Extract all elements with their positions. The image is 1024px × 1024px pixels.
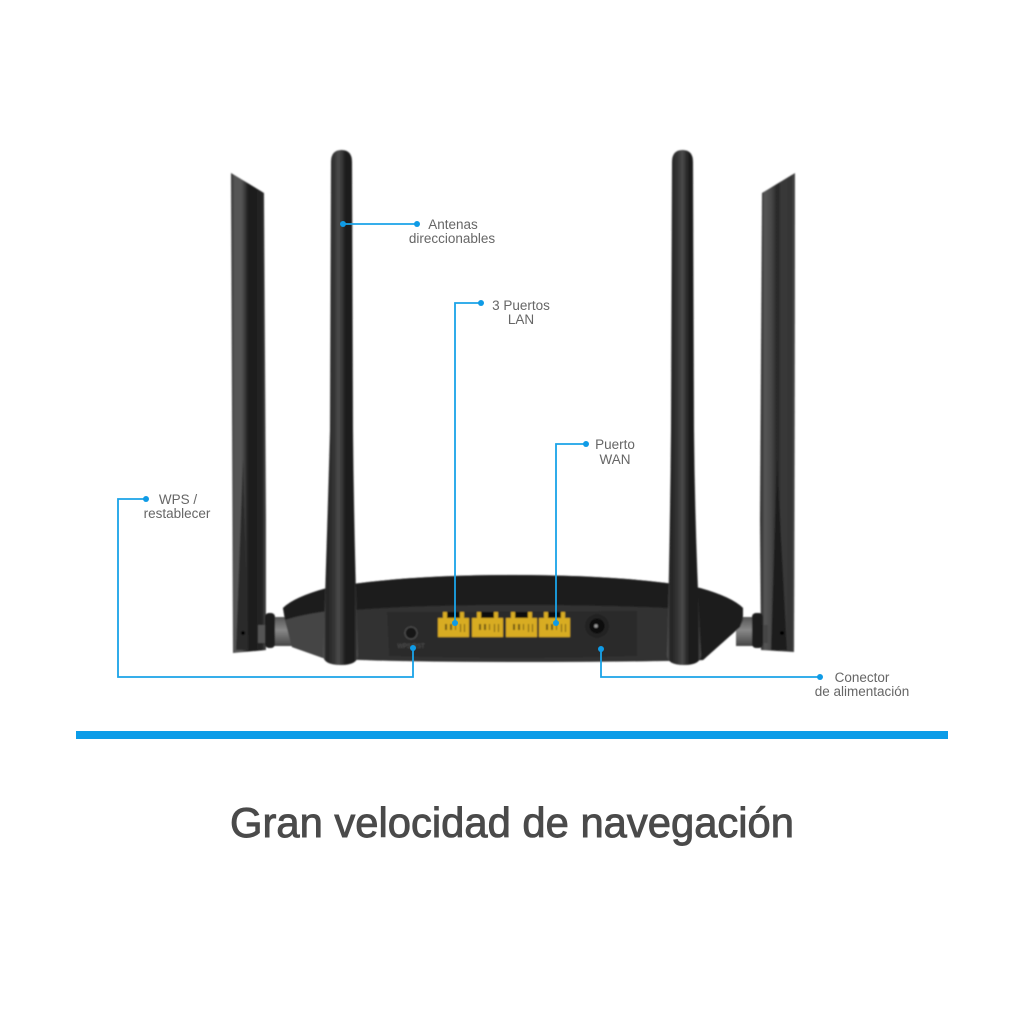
- callout: conector de alimentación: de alimentación: [815, 684, 909, 699]
- callout: puerto WAN: WAN: [600, 452, 630, 467]
- LAN port 3: [506, 612, 537, 637]
- right side wedge: [670, 608, 743, 661]
- antenna: far right flat panel: [760, 173, 795, 652]
- callout: WPS / restablecer: restablecer: [144, 506, 211, 521]
- antenna hinge right: [736, 613, 768, 648]
- top shell: [283, 575, 743, 620]
- callout: 3 puertos LAN: [452, 298, 550, 626]
- rear port recess: [387, 611, 637, 658]
- WPS reset button: [397, 627, 425, 650]
- callout: WPS / restablecer: WPS /: [159, 492, 197, 507]
- callout: antenas direccionables: Antenas: [428, 217, 478, 232]
- WAN port: [539, 612, 570, 637]
- callout: antenas direccionables: [340, 217, 495, 246]
- callout: 3 puertos LAN: 3 Puertos: [492, 298, 550, 313]
- router body: [283, 575, 743, 662]
- LAN port 2: [472, 612, 503, 637]
- callout: puerto WAN: [553, 437, 635, 626]
- WPS reset button: WPS/RST: [397, 644, 425, 650]
- callout: puerto WAN: Puerto: [595, 437, 635, 452]
- callout: conector de alimentación: [598, 646, 909, 699]
- blue divider bar: [76, 731, 948, 739]
- antenna: inner right: [667, 150, 701, 665]
- antenna: inner left: [323, 150, 358, 665]
- callout: antenas direccionables: direccionables: [409, 231, 495, 246]
- callout: WPS / restablecer: [118, 492, 416, 677]
- title: Gran velocidad de navegación: [230, 799, 794, 846]
- LAN port 1: [438, 612, 469, 637]
- callout: 3 puertos LAN: LAN: [508, 312, 534, 327]
- antenna: far left flat panel: [231, 173, 266, 653]
- power jack: [585, 614, 609, 638]
- left side wedge: [285, 609, 350, 660]
- callout: conector de alimentación: Conector: [835, 670, 890, 685]
- router illustration: [231, 150, 795, 665]
- antenna hinge left: [258, 613, 292, 648]
